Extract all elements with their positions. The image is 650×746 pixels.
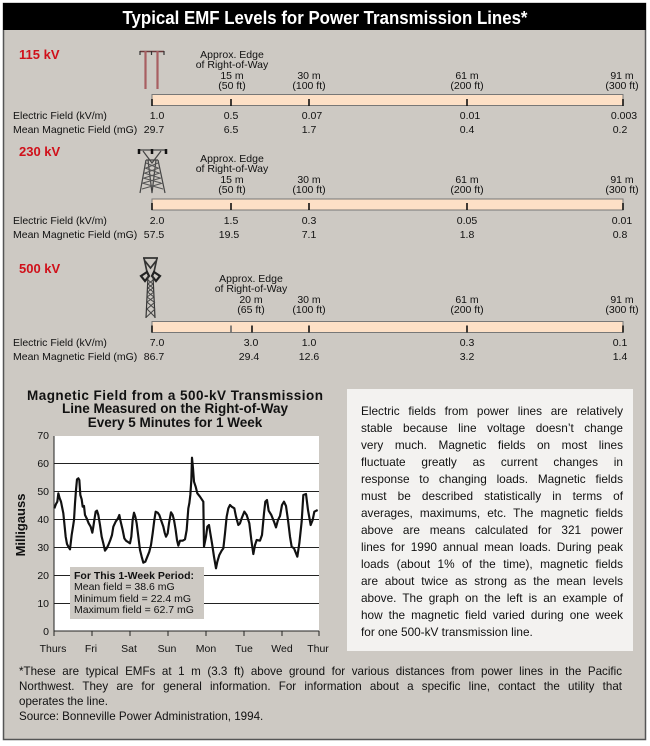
- row labels: Mean Magnetic Field (mG): [13, 124, 137, 136]
- explanatory text panel: for one 500-kV transmission line.: [361, 625, 533, 639]
- explanatory text panel: loads (about 1% of the time), magnetic fields: [361, 557, 623, 571]
- electric field values: 0.003: [611, 110, 637, 122]
- distance labels: (200 ft): [450, 184, 484, 196]
- icon: lattice tower: [139, 149, 167, 193]
- distance labels: 61 m: [455, 174, 479, 186]
- distance labels: (100 ft): [292, 304, 326, 316]
- electric field values: 0.3: [302, 215, 316, 227]
- title bar: Typical EMF Levels for Power Transmission Lines*: [122, 8, 528, 28]
- right-of-way label: of Right-of-Way: [215, 283, 288, 295]
- distance bar: [152, 322, 623, 332]
- explanatory text panel: very much. Magnetic fields on most lines: [361, 438, 623, 452]
- magnetic field values: 1.8: [460, 229, 474, 241]
- row labels: Mean Magnetic Field (mG): [13, 229, 137, 241]
- explanatory text panel: are about twice as strong as the mean levels: [361, 574, 623, 588]
- electric field values: 0.05: [457, 215, 477, 227]
- electric field values: 0.01: [460, 110, 480, 122]
- distance labels: 30 m: [297, 174, 321, 186]
- line chart: [13, 430, 329, 655]
- explanatory text panel: stable because line voltage doesn’t change: [361, 421, 623, 435]
- explanatory text panel: Electric fields from power lines are relatively: [361, 404, 623, 418]
- y axis labels: 20: [37, 570, 49, 582]
- y axis labels: 40: [37, 514, 49, 526]
- chart title: Every 5 Minutes for 1 Week: [88, 415, 263, 430]
- right-of-way label: Approx. Edge: [219, 273, 283, 285]
- distance labels: 91 m: [610, 70, 634, 82]
- distance labels: 61 m: [455, 70, 479, 82]
- footnote and source: *These are typical EMFs at 1 m (3.3 ft) above ground for various distances from power lines in the Pacific: [19, 665, 622, 678]
- electric field values: 1.5: [224, 215, 238, 227]
- magnetic field values: 0.8: [613, 229, 627, 241]
- magnetic field values: 29.7: [144, 124, 164, 136]
- stats callout: For This 1-Week Period:: [74, 570, 194, 582]
- distance labels: 15 m: [220, 70, 244, 82]
- x axis labels: Sun: [158, 643, 176, 655]
- distance labels: (65 ft): [237, 304, 265, 316]
- electric field values: 1.0: [150, 110, 164, 122]
- x axis labels: Fri: [85, 643, 97, 655]
- electric field values: 1.0: [302, 337, 316, 349]
- x axis labels: Wed: [271, 643, 293, 655]
- explanatory text panel: lines for 1990 annual mean loads. During peak: [361, 540, 623, 554]
- explanatory text panel: fluctuate greatly as current changes in: [361, 455, 623, 469]
- electric field values: 0.07: [302, 110, 322, 122]
- distance labels: (200 ft): [450, 80, 484, 92]
- magnetic field values: 0.2: [613, 124, 627, 136]
- voltage label 500 kV: 500 kV: [19, 261, 61, 276]
- magnetic field values: 3.2: [460, 351, 474, 363]
- magnetic field values: 12.6: [299, 351, 319, 363]
- footnote and source: operates the line.: [19, 695, 108, 708]
- explanatory text panel: above are means calculated for 321 power: [361, 523, 623, 537]
- title bar: [3, 3, 646, 30]
- stats callout: Minimum field = 22.4 mG: [74, 593, 191, 605]
- distance bar: [152, 199, 623, 210]
- row labels: Electric Field (kV/m): [13, 110, 107, 122]
- electric field values: 0.5: [224, 110, 238, 122]
- y axis labels: 10: [37, 598, 49, 610]
- distance bar: [152, 94, 623, 106]
- distance labels: (300 ft): [605, 80, 639, 92]
- explanatory text panel: how the magnetic field varied during one week: [361, 608, 623, 622]
- axes: [54, 436, 319, 636]
- explanatory text panel: response to changing loads. Magnetic fields: [361, 472, 623, 486]
- x axis labels: Tue: [235, 643, 253, 655]
- x axis labels: Thur: [307, 643, 329, 655]
- y axis title: Milligauss: [13, 494, 28, 556]
- row labels: Mean Magnetic Field (mG): [13, 351, 137, 363]
- plot area: [54, 436, 319, 631]
- chart title: Magnetic Field from a 500-kV Transmission: [27, 388, 323, 403]
- magnetic field values: 29.4: [239, 351, 259, 363]
- footnote and source: Source: Bonneville Power Administration, 1994.: [19, 710, 263, 723]
- distance labels: 15 m: [220, 174, 244, 186]
- electric field values: 2.0: [150, 215, 164, 227]
- magnetic field values: 1.7: [302, 124, 316, 136]
- magnetic field values: 6.5: [224, 124, 238, 136]
- icon: wooden H-frame pole: [140, 51, 164, 89]
- distance labels: (50 ft): [218, 80, 246, 92]
- chart title: Line Measured on the Right-of-Way: [62, 401, 288, 416]
- y axis labels: 0: [43, 626, 49, 638]
- stats callout: Mean field = 38.6 mG: [74, 581, 175, 593]
- footnote and source: Northwest. They are for general information. For information about a specific line, contact the utility that: [19, 680, 622, 693]
- explanatory text panel: [347, 389, 633, 651]
- distance labels: 91 m: [610, 174, 634, 186]
- footnote and source: [19, 665, 622, 723]
- electric field values: 7.0: [150, 337, 164, 349]
- distance labels: (100 ft): [292, 184, 326, 196]
- grid lines: [54, 464, 319, 604]
- distance labels: (50 ft): [218, 184, 246, 196]
- magnetic field values: 86.7: [144, 351, 164, 363]
- right-of-way label: of Right-of-Way: [196, 163, 269, 175]
- right-of-way label: of Right-of-Way: [196, 59, 269, 71]
- icon: V-string lattice tower: [141, 258, 160, 318]
- voltage label 230 kV: 230 kV: [19, 144, 61, 159]
- x axis labels: Mon: [196, 643, 216, 655]
- distance labels: 30 m: [297, 294, 321, 306]
- magnetic field values: 0.4: [460, 124, 474, 136]
- electric field values: 0.01: [612, 215, 632, 227]
- panel: 115 kV: [13, 47, 639, 136]
- explanatory text panel: averages, maximums, etc. The magnetic fields: [361, 506, 623, 520]
- distance labels: 91 m: [610, 294, 634, 306]
- electric field values: 0.1: [613, 337, 627, 349]
- magnetic field values: 57.5: [144, 229, 164, 241]
- distance labels: (300 ft): [605, 304, 639, 316]
- explanatory text panel: must be described statistically in terms of: [361, 489, 623, 503]
- y axis labels: 60: [37, 458, 49, 470]
- magnetic field values: 19.5: [219, 229, 239, 241]
- y axis labels: 70: [37, 430, 49, 442]
- distance labels: (100 ft): [292, 80, 326, 92]
- panel: 230 kV: [13, 144, 639, 241]
- electric field values: 3.0: [244, 337, 258, 349]
- distance labels: (200 ft): [450, 304, 484, 316]
- right-of-way label: Approx. Edge: [200, 153, 264, 165]
- stats callout: [70, 567, 204, 619]
- voltage label 115 kV: 115 kV: [19, 47, 60, 62]
- magnetic field values: 1.4: [613, 351, 627, 363]
- explanatory text panel: above. The graph on the left is an example of: [361, 591, 623, 605]
- x axis labels: Thurs: [40, 643, 66, 655]
- magnetic field values: 7.1: [302, 229, 316, 241]
- row labels: Electric Field (kV/m): [13, 337, 107, 349]
- stats callout: Maximum field = 62.7 mG: [74, 604, 194, 616]
- data line: [54, 458, 318, 568]
- distance labels: 30 m: [297, 70, 321, 82]
- x axis labels: Sat: [121, 643, 137, 655]
- row labels: Electric Field (kV/m): [13, 215, 107, 227]
- electric field values: 0.3: [460, 337, 474, 349]
- panel: 500 kV: [13, 258, 639, 363]
- y axis labels: 50: [37, 486, 49, 498]
- distance labels: 61 m: [455, 294, 479, 306]
- distance labels: 20 m: [239, 294, 263, 306]
- right-of-way label: Approx. Edge: [200, 49, 264, 61]
- distance labels: (300 ft): [605, 184, 639, 196]
- y axis labels: 30: [37, 542, 49, 554]
